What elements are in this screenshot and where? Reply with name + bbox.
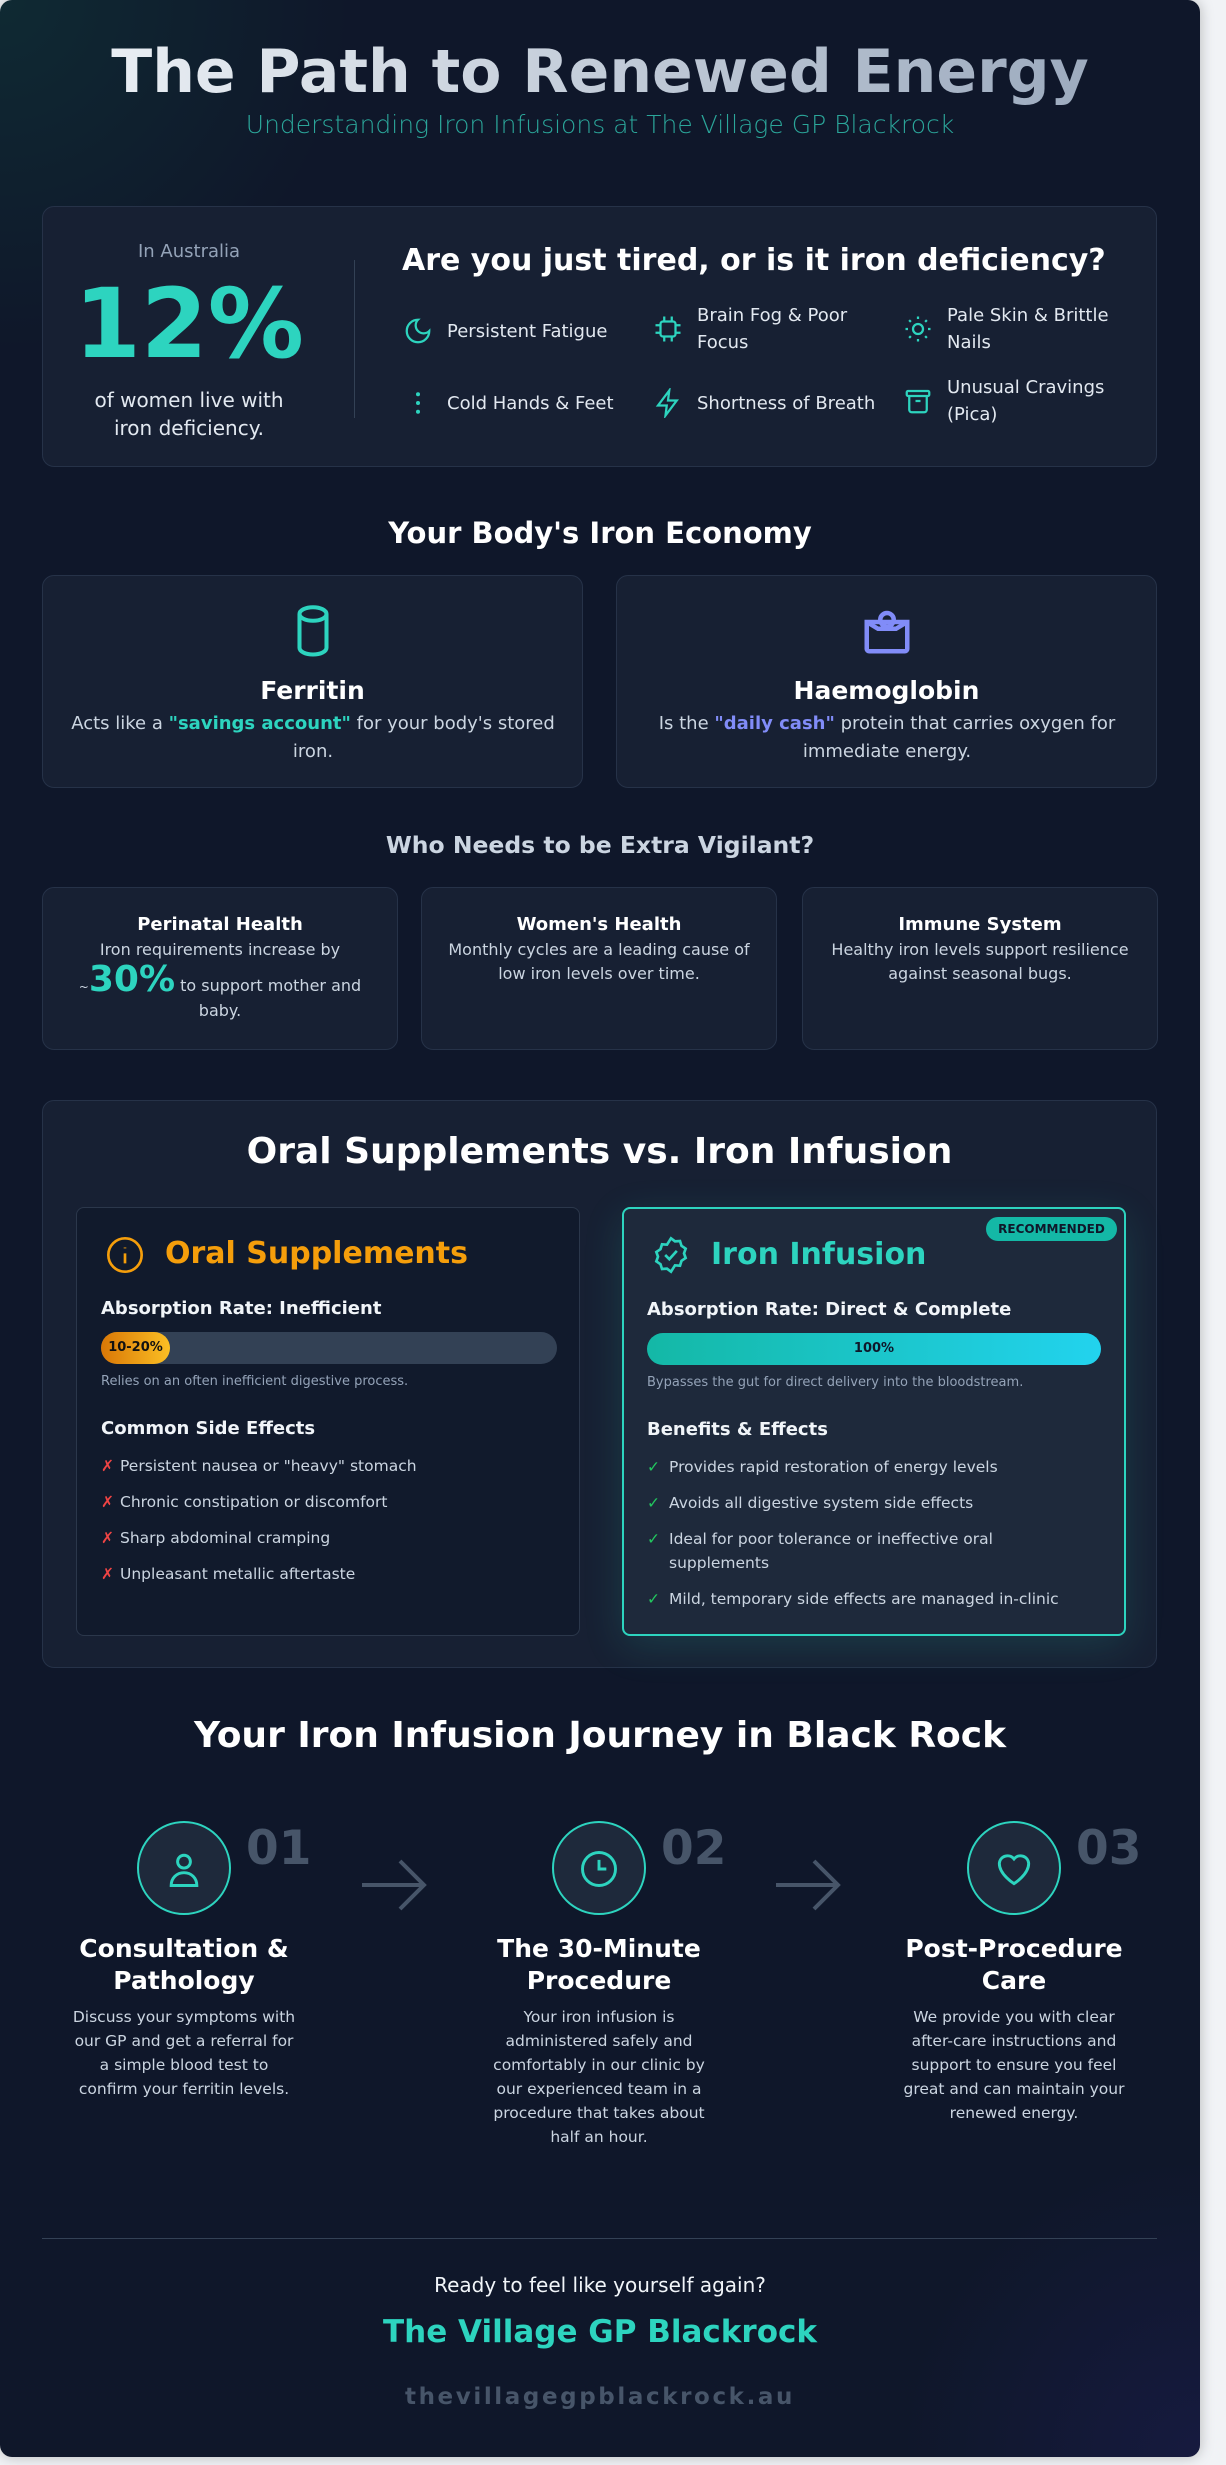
icon: info (107, 1237, 143, 1273)
symptom: cold hands: Cold Hands & Feet (447, 392, 614, 414)
arrow 1 (362, 1860, 427, 1910)
symptom: pale skin: Nails (947, 332, 991, 353)
list: side effects: ✗ Chronic constipation or discomfort (101, 1493, 387, 1511)
heading: journey: Your Iron Infusion Journey in Black Rock (194, 1715, 1006, 1756)
symptom: cravings (906, 377, 1104, 425)
subtitle: Understanding Iron Infusions at The Village GP Blackrock (246, 110, 954, 139)
question heading: Are you just tired, or is it iron deficiency? (402, 243, 1106, 278)
stat: 12%: 12% (74, 268, 304, 380)
icon: badge check (654, 1236, 688, 1274)
card: iron infusion (622, 1207, 1126, 1636)
card: womens health: Women's Health (517, 914, 681, 935)
card: womens health (421, 887, 777, 1050)
bar: 100%: 100% (854, 1341, 894, 1356)
icon: heart (967, 1821, 1061, 1915)
card: iron infusion: Iron Infusion (711, 1237, 926, 1272)
list: benefits: ✓ (647, 1458, 660, 1476)
card: oral supplements: Relies on an often inefficient digestive process. (101, 1374, 408, 1389)
list: side effects: ✗ Sharp abdominal cramping (101, 1529, 330, 1547)
symptom list (406, 305, 1109, 425)
symptom: fatigue: Persistent Fatigue (447, 320, 607, 342)
heading: Oral Supplements vs. Iron Infusion (247, 1131, 952, 1172)
card: iron infusion: Benefits & Effects (647, 1419, 828, 1440)
step 1: 01 (246, 1821, 311, 1876)
icon: wallet (864, 610, 910, 654)
step 2: The 30-Minute Procedure (497, 1934, 701, 1995)
card: oral supplements (76, 1207, 580, 1636)
card: immune (802, 887, 1158, 1050)
card: perinatal (42, 887, 398, 1050)
card: iron infusion: Bypasses the gut for direct delivery into the bloodstream. (647, 1375, 1023, 1390)
icon: clock (552, 1821, 646, 1915)
panel: comparison (42, 1100, 1157, 1668)
list: side effects (101, 1457, 417, 1583)
symptom: brain fog (656, 305, 848, 353)
bar: 10-20%: 10-20% (108, 1340, 163, 1355)
arrow 2 (776, 1860, 841, 1910)
symptom: fatigue (406, 318, 607, 344)
card: womens health: Monthly cycles are a leading cause of low iron levels over time. (448, 940, 750, 983)
step 2 (493, 1821, 726, 2146)
stat: 12%: iron deficiency. (114, 416, 264, 440)
step 1 (73, 1821, 311, 2098)
footer (383, 2273, 818, 2410)
badge: recommended: RECOMMENDED (998, 1222, 1105, 1236)
symptom: cravings: (Pica) (947, 404, 997, 425)
stat: 12% (74, 241, 304, 440)
step 3: 03 (1076, 1821, 1141, 1876)
title: The Path to Renewed Energy (111, 37, 1089, 107)
symptom: shortness of breath (656, 388, 875, 418)
step 3: Post-Procedure Care (905, 1934, 1123, 1995)
list: benefits: Avoids all digestive system side effects (669, 1494, 973, 1512)
footer: The Village GP Blackrock (383, 2314, 817, 2350)
footer: Ready to feel like yourself again? (434, 2273, 766, 2297)
list: benefits: ✓ (647, 1590, 660, 1608)
stat: 12%: of women live with (94, 388, 284, 412)
symptom: cravings: Unusual Cravings (947, 377, 1104, 398)
badge: recommended (986, 1217, 1117, 1241)
list: benefits: Ideal for poor tolerance or ineffective oral supplements (669, 1530, 993, 1572)
list: benefits: ✓ (647, 1530, 660, 1548)
bar: 100% (647, 1333, 1101, 1365)
list: benefits (647, 1458, 1059, 1608)
symptom: pale skin (906, 305, 1109, 353)
card: immune: Immune System (898, 914, 1062, 935)
list: side effects: ✗ Persistent nausea or "heavy" stomach (101, 1457, 417, 1475)
step 2: 02 (661, 1821, 726, 1876)
symptom: brain fog: Focus (697, 332, 748, 353)
heading: who needs to be vigilant: Who Needs to be Extra Vigilant? (386, 831, 814, 859)
step 3: We provide you with clear after-care instructions and support to ensure you feel great and can maintain your renewed energy. (904, 2008, 1124, 2122)
card: perinatal: Iron requirements increase by (100, 940, 340, 959)
icon: user circle (137, 1821, 231, 1915)
card: oral supplements: Absorption Rate: Inefficient (101, 1298, 381, 1319)
icon: cylinder (297, 605, 328, 656)
panel: iron deficiency stats and symptoms (42, 206, 1157, 467)
symptom: pale skin: Pale Skin & Brittle (947, 305, 1109, 326)
step 2: Your iron infusion is administered safely and comfortably in our clinic by our experienced team in a procedure that takes about half an hour. (493, 2008, 705, 2146)
stat: 12%: In Australia (138, 241, 240, 262)
title (0, 30, 1200, 114)
step 1: Discuss your symptoms with our GP and get a referral for a simple blood test to confirm your ferritin levels. (73, 2008, 295, 2098)
step 3 (904, 1821, 1141, 2122)
card: iron infusion: Absorption Rate: Direct & Complete (647, 1299, 1011, 1320)
card: ferritin (42, 575, 583, 788)
step 1: Consultation & Pathology (79, 1934, 289, 1995)
card: oral supplements: Common Side Effects (101, 1418, 315, 1439)
footer: thevillagegpblackrock.au (405, 2384, 795, 2410)
card: haemoglobin: Is the "daily cash" protein that carries oxygen for immediate energy. (659, 713, 1115, 762)
list: benefits: Mild, temporary side effects are managed in-clinic (669, 1590, 1059, 1608)
card: ferritin: Ferritin (260, 676, 365, 705)
bar: 10-20% (101, 1332, 557, 1364)
card: oral supplements: Oral Supplements (165, 1236, 468, 1271)
heading: iron economy: Your Body's Iron Economy (388, 516, 812, 550)
card: haemoglobin (616, 575, 1157, 788)
card: ferritin: Acts like a "savings account" for your body's stored iron. (71, 713, 555, 762)
list: benefits: Provides rapid restoration of energy levels (669, 1458, 998, 1476)
card: perinatal: Perinatal Health (137, 914, 303, 935)
list: side effects: ✗ Unpleasant metallic aftertaste (101, 1565, 355, 1583)
symptom: shortness of breath: Shortness of Breath (697, 392, 875, 414)
card: immune: Healthy iron levels support resilience against seasonal bugs. (831, 940, 1129, 983)
list: benefits: ✓ (647, 1494, 660, 1512)
symptom: brain fog: Brain Fog & Poor (697, 305, 847, 326)
card: haemoglobin: Haemoglobin (794, 676, 979, 705)
card: perinatal: ~30% to support mother and baby. (79, 959, 361, 1020)
